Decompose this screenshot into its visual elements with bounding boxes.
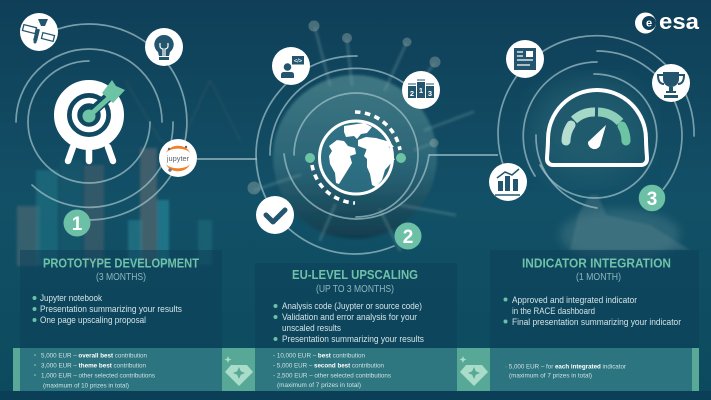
icon: satellite [20,13,58,51]
heading: INDICATOR INTEGRATION [522,256,671,270]
deliverables list [504,295,681,327]
icon: podium: 3 [428,89,432,98]
connector lines [197,155,498,159]
icon: trophy [652,64,690,102]
prize band [13,348,699,391]
deliverables list: Final presentation summarizing your indicator [512,317,681,327]
badge 1 [64,210,90,236]
icon: coder: </> [294,59,302,65]
left arcs [16,24,187,220]
prizes: upscaling max: (maximum of 7 prizes in total) [277,382,361,389]
dashed ring with green dots [305,112,406,203]
prizes: upscaling best: - 10,000 EUR – best contribution [273,352,366,360]
deliverables list: Presentation summarizing your results [40,304,182,314]
deliverables list [274,301,424,344]
panel: prototype development [32,256,199,325]
badge 1: 1 [72,214,83,235]
panel: eu-level upscaling [274,267,424,344]
deliverables list: One page upscaling proposal [40,315,146,325]
badge 3: 3 [647,189,657,210]
icon: check mark [256,196,294,234]
prizes: prototype: 5,000 EUR – overall best contribution [41,352,148,360]
badge 3 [638,184,666,212]
prizes: prototype theme: 3,000 EUR – theme best contribution [41,362,147,370]
icon: podium: 2 [410,89,414,98]
icon: jupyter: jupyter [166,154,190,163]
icon: globe [320,121,395,194]
panel backdrops [0,250,711,400]
icon: coder [272,47,310,85]
prizes: upscaling second: - 5,000 EUR – second best contribution [273,362,385,370]
prizes: integration: · 5,000 EUR – for each integrated indicator [505,364,626,370]
icon: podium: 1 [419,86,423,95]
icon: newspaper [506,40,544,78]
deliverables list: Presentation summarizing your results [282,334,424,344]
icon: gauge dashboard [547,90,647,165]
prizes: integration max: (maximum of 7 prizes in total) [509,372,592,380]
icon: target with dart [60,80,125,161]
icon: diamond 2 [460,356,488,386]
icon: jupyter [159,139,197,177]
icon: growth chart [489,163,527,201]
right arcs [498,36,694,208]
prizes: upscaling others: - 2,500 EUR – other selected contributions [273,372,391,380]
icon: diamond 1 [224,356,253,386]
icon: podium [402,71,440,109]
icon: light bulb [145,28,183,66]
heading: EU-LEVEL UPSCALING [292,267,418,282]
duration: (1 MONTH) [576,271,621,283]
prize bullets: prototype [34,354,36,376]
deliverables list: unscaled results [282,323,341,333]
logo: esa: e [646,18,652,30]
deliverables list: in the RACE dashboard [512,306,595,316]
deliverables list: Analysis code (Juypter or source code) [282,301,422,311]
deliverables list: Approved and integrated indicator [512,295,637,305]
prizes: prototype others: 1,000 EUR – other selected contributions [41,372,155,380]
badge 2 [394,222,422,250]
panel: indicator integration [504,256,681,327]
heading: PROTOTYPE DEVELOPMENT [43,256,199,270]
middle arcs [256,56,429,254]
duration: (3 MONTHS) [96,271,146,283]
deliverables list: Jupyter notebook [40,293,102,303]
logo: esa: esa [659,9,700,34]
deliverables list: Validation and error analysis for your [282,312,417,322]
badge 2: 2 [403,227,413,248]
prizes: prototype max: (maximum of 10 prizes in total) [43,382,129,390]
duration: (UP TO 3 MONTHS) [316,283,394,295]
deliverables list [32,293,182,325]
logo: esa [635,9,700,34]
